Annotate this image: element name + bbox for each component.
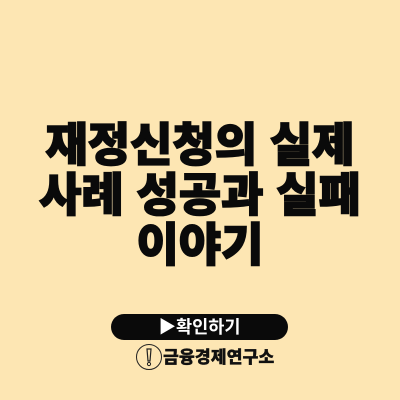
button: confirm — [111, 314, 288, 340]
title: 사례 성공과 실패 — [39, 169, 361, 221]
title: 이야기 — [137, 219, 263, 271]
icon: exclamation circle — [136, 344, 162, 370]
button: confirm: ▶확인하기 — [159, 317, 240, 337]
title: 재정신청의 실제 — [45, 119, 355, 171]
brand name: 금융경제연구소 — [163, 347, 274, 367]
title — [38, 119, 361, 271]
